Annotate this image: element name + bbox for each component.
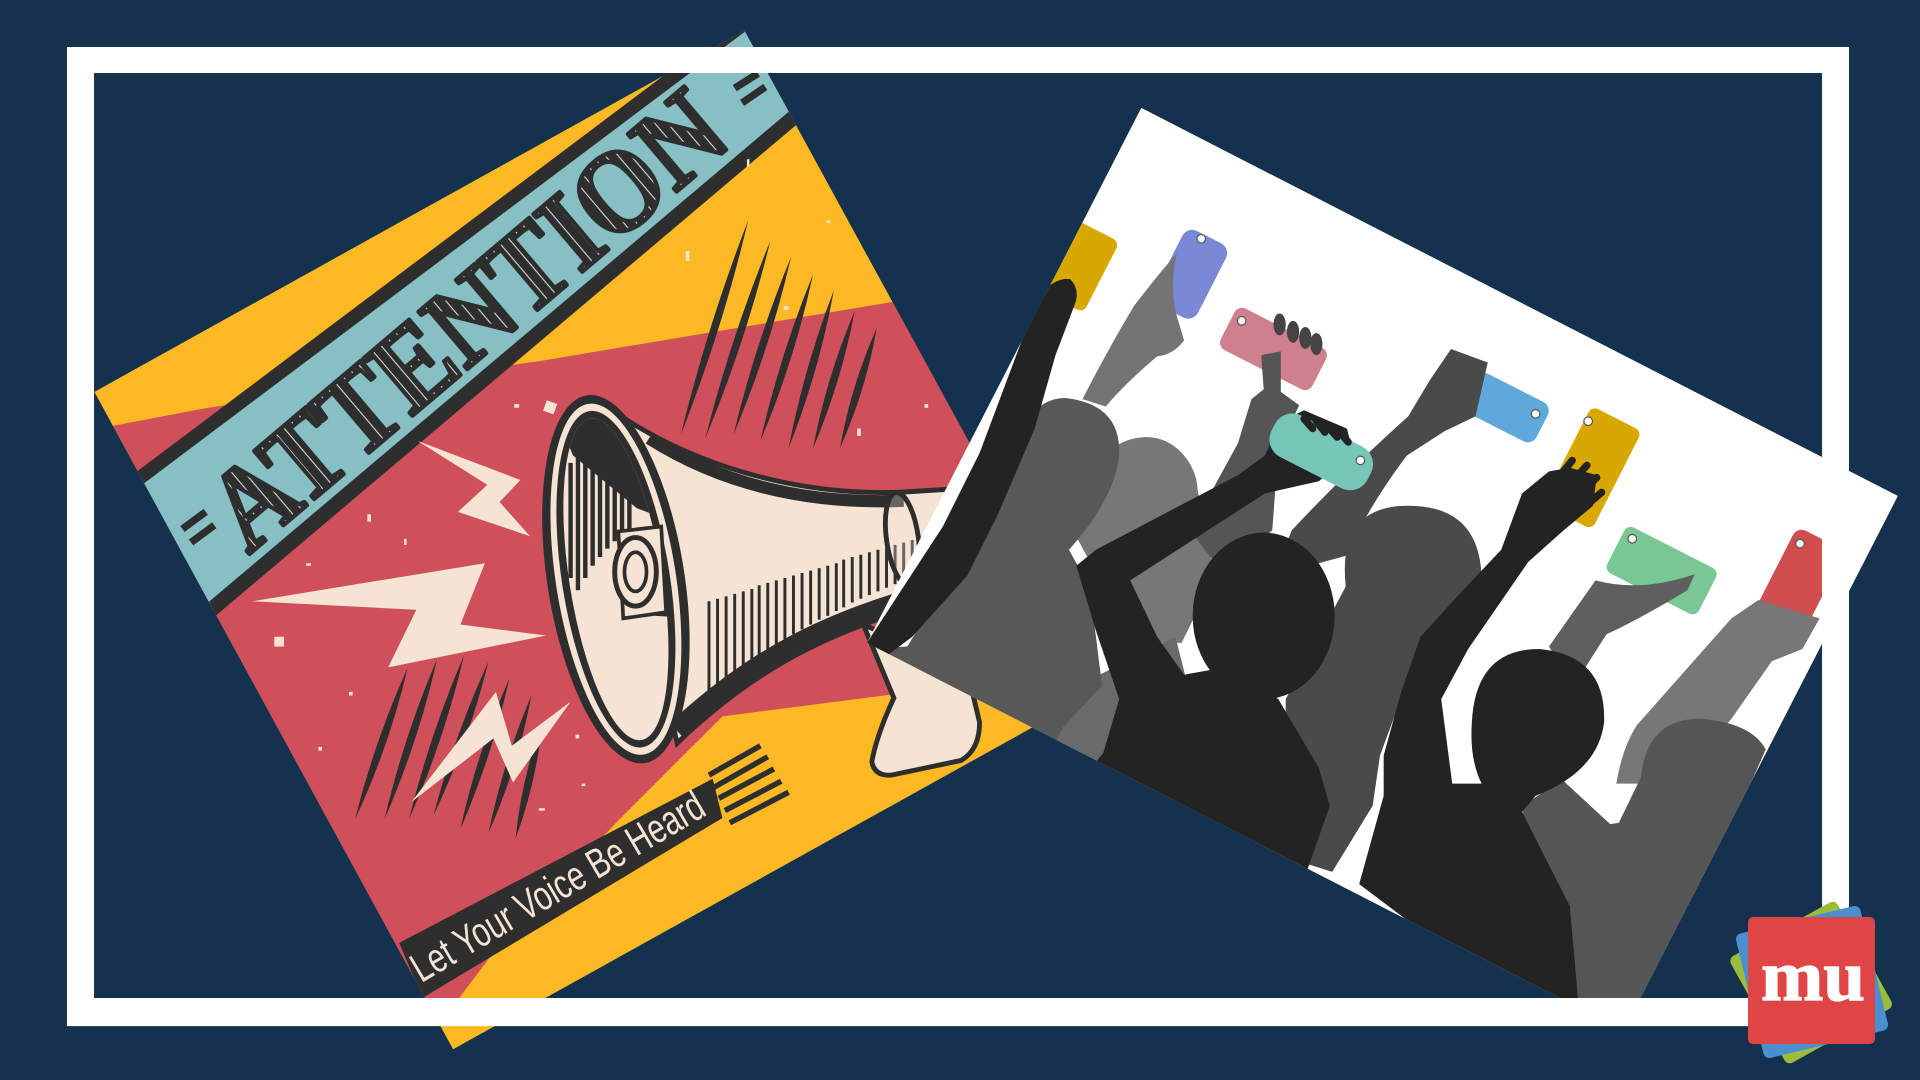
arm and torso — [1076, 410, 1353, 882]
poster yellow base — [94, 31, 1103, 1049]
gray figure left — [857, 398, 1200, 784]
banner upper stripe — [138, 30, 745, 484]
phone pink — [1220, 308, 1327, 390]
distress specks — [274, 159, 928, 811]
phone yellow right — [1559, 408, 1640, 528]
bell hub — [615, 527, 666, 618]
head — [1193, 533, 1335, 699]
phone green — [1604, 524, 1719, 617]
arm blue phone — [1273, 349, 1488, 576]
phone red — [1760, 530, 1822, 616]
sound spikes upper right — [681, 220, 877, 448]
phone teal — [1263, 407, 1380, 497]
megaphone body — [626, 416, 947, 748]
neck ring — [882, 494, 921, 582]
cone top band — [649, 438, 904, 501]
arm to green phone — [1549, 574, 1695, 686]
gray figure right — [1522, 719, 1766, 1016]
flag stripes — [709, 746, 789, 823]
poster: attention megaphone — [94, 30, 1032, 1050]
cone bottom band — [676, 594, 892, 739]
teal banner — [140, 30, 792, 608]
lower gray mass — [1041, 637, 1200, 784]
tagline strip — [399, 779, 722, 998]
cone ribs — [709, 540, 912, 692]
logo wordmark: mu — [1761, 936, 1865, 1016]
logo blue card — [1735, 905, 1889, 1059]
phone blue — [1475, 373, 1549, 442]
phone violet — [1168, 230, 1228, 319]
torso and head — [857, 398, 1119, 747]
fingers on phones — [1273, 313, 1322, 355]
cone — [626, 416, 947, 748]
black arm far left — [867, 279, 1077, 655]
megaphone bell — [542, 395, 690, 764]
arm to red phone — [1616, 600, 1820, 784]
head light gray — [1078, 437, 1215, 643]
arm pink phone — [1190, 351, 1299, 576]
black figure one — [1076, 410, 1353, 882]
banner left equals mark — [182, 512, 214, 542]
arm head and torso — [1359, 468, 1604, 1016]
logo red card — [1748, 917, 1875, 1044]
poster red field — [112, 302, 970, 998]
lightning bolt top — [418, 441, 530, 536]
tagline text: Let Your Voice Be Heard — [402, 781, 713, 991]
black figure two — [1359, 460, 1604, 1016]
arm to violet phone — [1082, 253, 1184, 407]
bell rim — [542, 395, 690, 764]
logo: marketing mu — [1728, 900, 1894, 1065]
logo green card — [1728, 900, 1894, 1065]
banner lower stripe — [209, 112, 796, 616]
banner right equals mark — [735, 73, 765, 103]
photo white background — [867, 108, 1898, 1031]
back heads — [1078, 349, 1488, 643]
photo: crowd holding up phones — [857, 108, 1898, 1031]
bell interior — [568, 418, 667, 617]
banner heading: ATTENTION — [182, 64, 750, 574]
phone yellow left — [1046, 222, 1118, 310]
lightning bolt large — [252, 563, 546, 667]
phone camera dots — [1197, 234, 1804, 548]
back figure arms — [1082, 253, 1820, 784]
sound spikes lower left — [355, 655, 542, 839]
megaphone handle — [863, 624, 980, 775]
fingers — [1553, 460, 1602, 509]
lightning bolt lower — [411, 692, 571, 802]
gray figure center — [1286, 506, 1482, 872]
